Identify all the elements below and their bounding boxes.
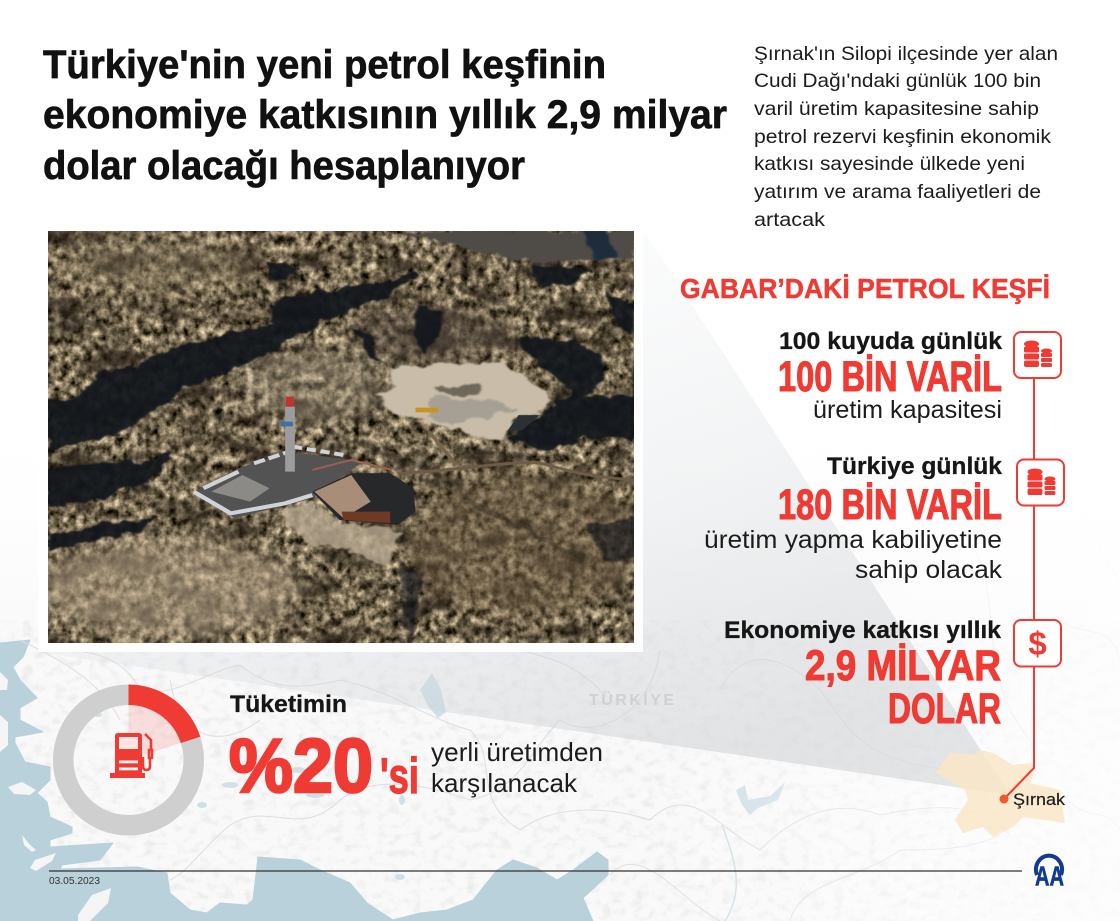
distant ridge	[398, 231, 634, 262]
projection cone from map to photo	[38, 225, 1010, 795]
stat: 180 bin varil: üretim yapma kabiliyetine	[704, 526, 1002, 554]
connector line from icons to Şırnak	[1004, 378, 1034, 799]
intro paragraph: Cudi Dağı'ndaki günlük 100 bin	[754, 70, 1041, 92]
stat: 2,9 milyar dolar	[724, 617, 1002, 733]
consumption callout: yerli üretimden	[431, 737, 603, 767]
icon: oil barrels	[1017, 460, 1064, 506]
stat: 180 bin varil: sahip olacak	[855, 556, 1003, 584]
drilling pad	[194, 452, 363, 518]
consumption callout: 'si	[380, 748, 419, 804]
stat: 100 bin varil: üretim kapasitesi	[813, 396, 1002, 424]
stat: 100 bin varil: 100 kuyuda günlük	[779, 328, 1003, 355]
consumption callout: %20	[229, 724, 373, 809]
map label: Türkiye: TÜRKİYE	[589, 690, 674, 709]
ridge streaks	[59, 282, 585, 558]
stat: 2,9 milyar dolar: 2,9 MİLYAR	[805, 642, 1001, 690]
icon: fuel pump	[110, 733, 152, 778]
icon: dollar	[1014, 620, 1061, 666]
footer rule	[49, 870, 1022, 872]
stat: 100 bin varil	[778, 328, 1003, 424]
icon: dollar: $	[1028, 625, 1047, 662]
consumption callout: Tüketimin	[230, 691, 347, 718]
background map of Türkiye	[0, 380, 1120, 921]
icon: oil barrels	[1014, 332, 1061, 378]
intro paragraph: varil üretim kapasitesine sahip	[754, 98, 1039, 120]
stat: 100 bin varil: 100 BİN VARİL	[778, 353, 1002, 401]
stat: 2,9 milyar dolar: Ekonomiye katkısı yıllık	[724, 617, 1002, 644]
access road	[398, 462, 634, 480]
stat: 180 bin varil: 180 BİN VARİL	[778, 481, 1002, 529]
section heading: GABAR’DAKİ PETROL KEŞFİ	[680, 273, 1050, 304]
title	[43, 43, 727, 188]
consumption callout: karşılanacak	[431, 768, 578, 798]
intro paragraph: Şırnak'ın Silopi ilçesinde yer alan	[754, 43, 1058, 65]
rock debris	[281, 502, 402, 567]
location marker: Şırnak: Şırnak	[1013, 790, 1066, 809]
donut chart: 20 percent	[63, 684, 200, 825]
logo: Anadolu Agency	[1035, 856, 1064, 892]
borders and rivers	[20, 440, 1120, 921]
Şırnak province highlight	[935, 750, 1065, 837]
sea	[0, 640, 608, 921]
fade of map towards top	[0, 380, 1120, 642]
large tonal areas	[36, 235, 643, 638]
title: Türkiye'nin yeni petrol keşfinin	[43, 43, 606, 87]
title: dolar olacağı hesaplanıyor	[43, 144, 525, 188]
intro paragraph: artacak	[754, 209, 825, 231]
intro paragraph: yatırım ve arama faaliyetleri de	[754, 181, 1041, 203]
stat: 180 bin varil	[704, 453, 1003, 584]
valley shadows	[48, 265, 634, 642]
date: 03.05.2023	[49, 876, 100, 887]
intro paragraph	[754, 43, 1058, 231]
stat: 2,9 milyar dolar: DOLAR	[888, 685, 1001, 733]
quarry clearing	[375, 362, 552, 442]
logo: Anadolu Agency: AA	[1035, 860, 1064, 892]
title: ekonomiye katkısının yıllık 2,9 milyar	[43, 93, 727, 137]
photo frame	[38, 222, 643, 652]
consumption callout	[229, 691, 603, 809]
drilling rig	[285, 407, 295, 472]
intro paragraph: petrol rezervi keşfinin ekonomik	[754, 126, 1051, 148]
stat: 180 bin varil: Türkiye günlük	[827, 453, 1003, 480]
lakes	[94, 673, 785, 880]
mud pit	[312, 473, 415, 525]
intro paragraph: katkısı sayesinde ülkede yeni	[754, 153, 1025, 175]
islands	[0, 672, 111, 921]
aerial photo of the oil rig site	[36, 231, 643, 643]
